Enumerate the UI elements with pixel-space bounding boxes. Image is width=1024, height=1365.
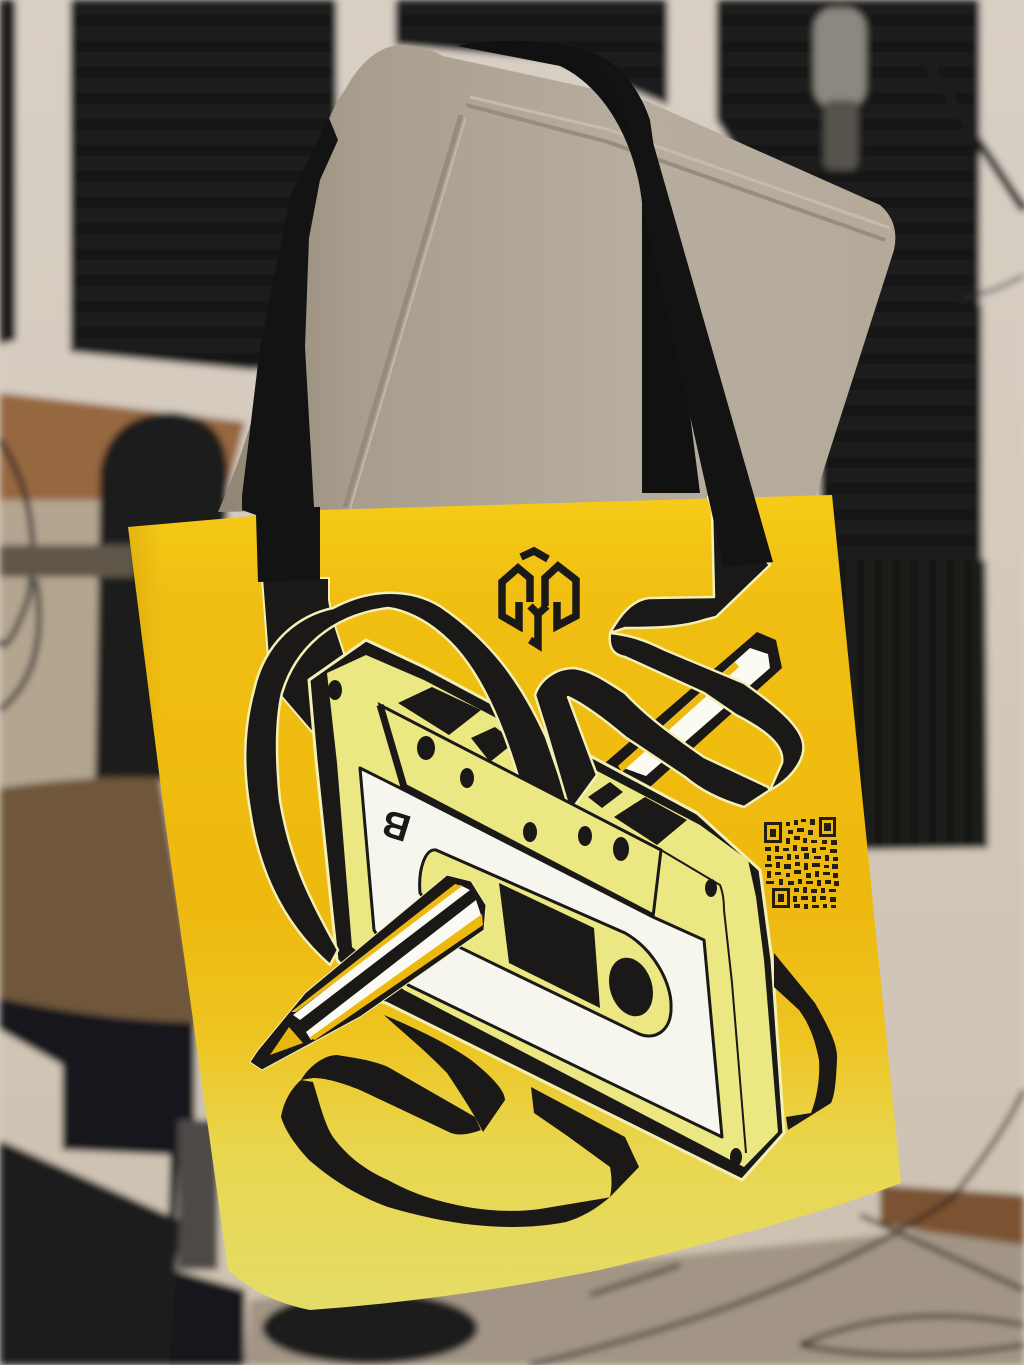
tape slots	[328, 680, 687, 845]
artwork: pencil end behind cassette	[605, 632, 782, 787]
chair seat	[0, 777, 200, 1022]
microphone	[814, 8, 1024, 300]
thin inner contour	[661, 850, 746, 1153]
white label	[360, 768, 722, 1137]
foam panel: upper left	[70, 0, 337, 370]
artwork: pencil through reel	[250, 875, 486, 1070]
rear handle strap	[457, 41, 700, 493]
front handle left	[242, 118, 338, 582]
stand base	[262, 1292, 478, 1364]
chair column	[178, 1120, 218, 1270]
foam panel: right column	[716, 0, 988, 850]
bag left side shade	[128, 510, 322, 1310]
artwork: logo mark	[502, 551, 576, 645]
baseboard	[880, 1185, 1024, 1245]
reel window	[420, 850, 671, 1036]
metal arm	[0, 545, 135, 577]
floor cables	[530, 1090, 1024, 1365]
foam panel: upper centre	[395, 0, 668, 105]
hanging cables	[0, 440, 39, 710]
front handle right	[600, 56, 773, 567]
tote bag body	[128, 495, 901, 1310]
wall tint below the rail	[0, 500, 100, 790]
chair back with seams	[218, 45, 895, 512]
chair base	[0, 998, 245, 1365]
artwork: cassette shell	[309, 640, 784, 1180]
floor	[0, 1140, 180, 1365]
artwork: printed strap band	[262, 578, 346, 732]
hanging black coat	[95, 412, 228, 780]
artwork: cassette front	[360, 705, 746, 1166]
artwork: QR code	[764, 817, 839, 909]
flap with screw holes	[380, 705, 742, 1166]
wooden rail	[0, 393, 245, 500]
reel hole	[602, 952, 660, 1022]
foam panel: left edge	[0, 0, 16, 345]
side B letter: B	[377, 801, 416, 849]
artwork: tape ribbons	[245, 497, 837, 1227]
black window	[499, 883, 600, 1008]
